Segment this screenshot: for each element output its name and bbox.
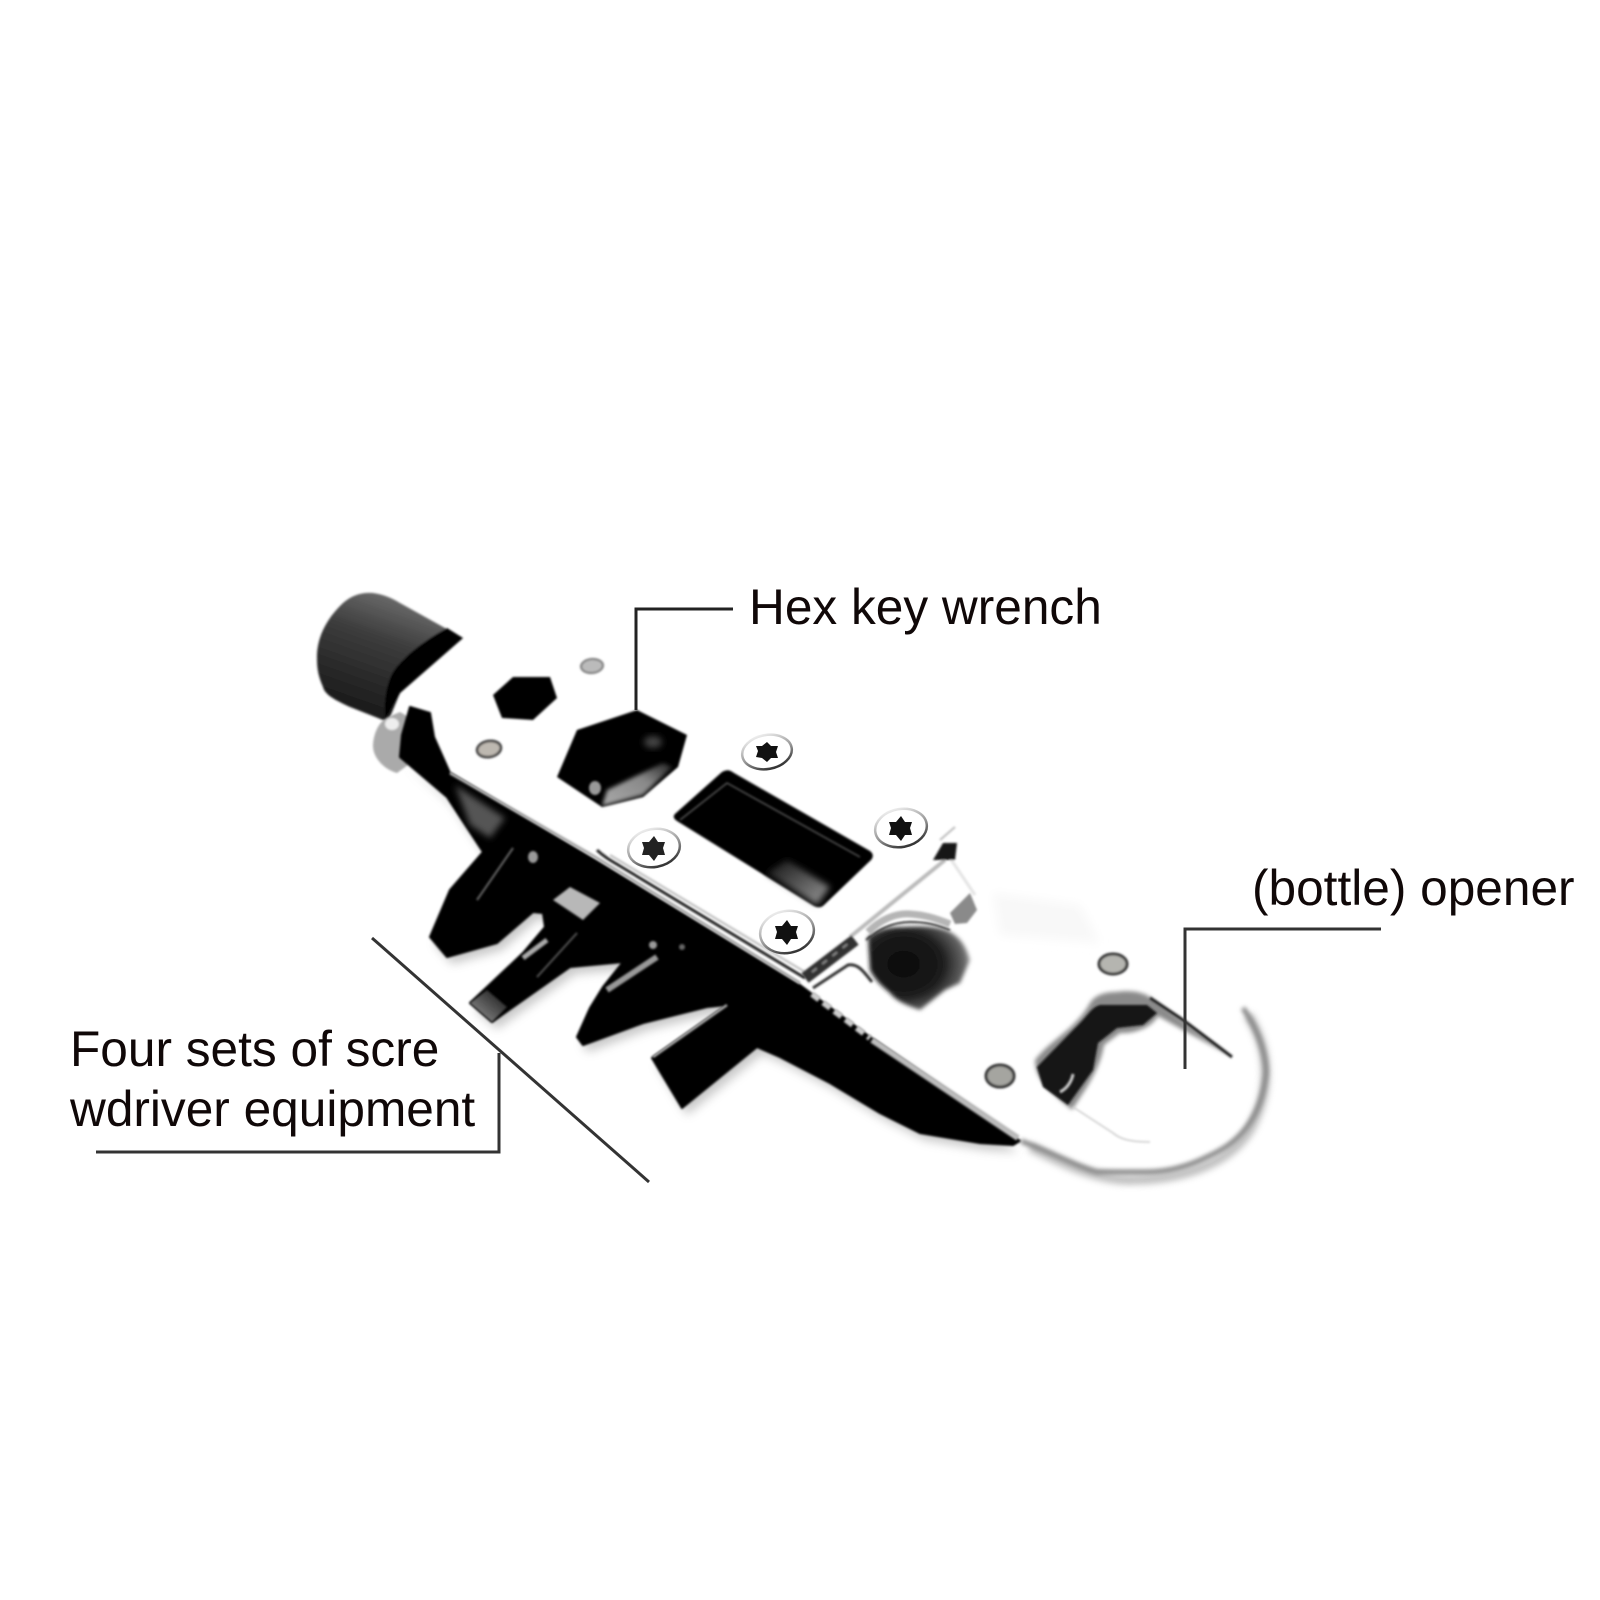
sheen: [1060, 1074, 1073, 1092]
screw: left: [625, 825, 683, 871]
plate edge strip: [450, 773, 805, 983]
screw: bottom: [757, 907, 817, 957]
hole: lower rivet: [476, 739, 502, 759]
twisted base: [805, 940, 855, 978]
screw: top: [739, 731, 795, 773]
label second line: wdriver equipment: [69, 1081, 475, 1137]
faint plate texture: [993, 893, 1100, 943]
serrated edge: [812, 994, 1018, 1138]
leader line: [96, 1053, 499, 1152]
arm curve: [868, 914, 950, 932]
lower edge: [1073, 1107, 1150, 1142]
opener outer rim: [1021, 1008, 1266, 1180]
label: Four sets of scre: [70, 1021, 439, 1077]
callout: hex key wrench: [636, 579, 1102, 710]
rectangular window: [674, 770, 873, 907]
bracket line: [372, 938, 649, 1182]
fourth bit highlight: [653, 1005, 727, 1057]
black notch: [933, 843, 957, 860]
collar: [553, 887, 600, 920]
knob dark band: [385, 628, 463, 720]
leader line: [636, 609, 733, 710]
arm lines: [850, 860, 945, 937]
gray drop: [950, 893, 977, 924]
recess behind clip: [868, 927, 970, 1010]
knob: [317, 593, 463, 722]
bottle opener hole: [1035, 991, 1232, 1142]
label: Hex key wrench: [749, 579, 1102, 635]
second bit highlights: [523, 940, 547, 958]
third bit highlight: [607, 957, 657, 990]
first bit highlight: [477, 848, 513, 900]
leader line: [1185, 929, 1381, 1069]
small hex opening: [493, 677, 557, 720]
label: (bottle) opener: [1252, 860, 1575, 916]
dark gray upper zone: [455, 785, 505, 838]
hole: upper rivet: [580, 658, 604, 674]
tool illustration: [317, 593, 1266, 1180]
clip metal arm: [805, 827, 977, 988]
screw: right: [872, 805, 930, 851]
second bit tip: [470, 990, 507, 1022]
opener rivet: upper: [1099, 954, 1127, 974]
opener rivet: lower: [986, 1065, 1014, 1087]
dark top edge taper: [1150, 998, 1232, 1057]
dark: [1037, 1005, 1157, 1105]
callout: screwdriver equipment: [69, 938, 649, 1182]
pin: [373, 712, 414, 773]
large hex opening: [557, 710, 687, 807]
underbody drop shadow: [405, 764, 1018, 1152]
black underbody with four bits: [400, 707, 1020, 1145]
callout: bottle opener: [1185, 860, 1575, 1069]
halo: [1035, 991, 1232, 1110]
